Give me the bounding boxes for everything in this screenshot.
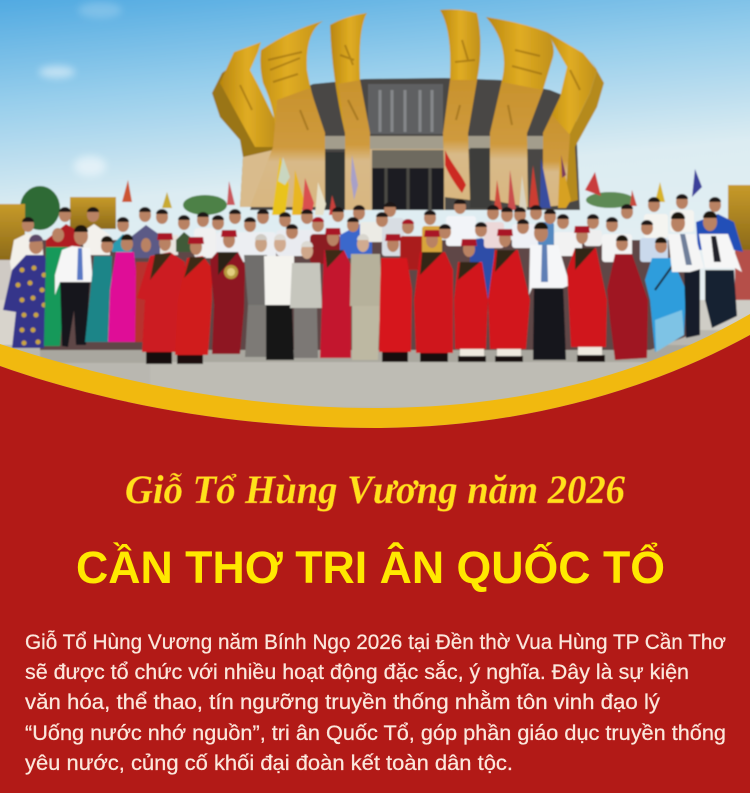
petal centre left: [330, 13, 370, 210]
back row clothing: [10, 210, 743, 300]
crowd: front row: [3, 211, 742, 364]
script subtitle: Giỗ Tổ Hùng Vương năm 2026: [125, 467, 625, 512]
purple ao dai man: [3, 234, 54, 348]
white shirt man grey tie: [668, 212, 704, 338]
sky: [0, 0, 750, 345]
red robe 5: [454, 239, 488, 362]
petal left big: [250, 21, 325, 207]
body paragraph: “Uống nước nhớ nguồn”, tri ân Quốc Tổ, góp phần giáo dục truyền thống: [25, 722, 726, 745]
drum wall: [250, 78, 580, 210]
red robe 6: [488, 229, 530, 362]
white shirt man with blue tie: [55, 225, 93, 347]
photo: sky, temple and delegation: [0, 0, 750, 430]
flags: [122, 150, 702, 215]
back row hair: [22, 194, 721, 229]
body paragraph: yêu nước, củng cố khối đại đoàn kết toàn dân tộc.: [25, 752, 513, 775]
dark red robe with medallion: [210, 230, 245, 354]
body paragraph: [25, 631, 726, 775]
dark red ao dai: [607, 235, 648, 360]
trees and gold drums in the background: [0, 185, 750, 320]
blue ao dai with bag: [645, 237, 686, 352]
body paragraph: sẽ được tổ chức với nhiều hoạt động đặc sắc, ý nghĩa. Đây là sự kiện: [25, 661, 689, 684]
pink ao dai: [108, 234, 138, 342]
white shirt man black trousers: [264, 234, 295, 360]
back row faces: [22, 195, 721, 239]
red robe 7: [567, 226, 607, 362]
floral dress: [135, 238, 152, 342]
building: golden crown temple: [212, 9, 604, 210]
plaza ground and steps: [0, 300, 750, 430]
red panel: [0, 335, 750, 793]
grey shirt man: [244, 234, 267, 357]
teal ao dai: [85, 236, 113, 342]
yellow curved band: [0, 314, 750, 428]
white shirt man dark tie: [699, 211, 742, 328]
petal centre right: [440, 9, 480, 200]
crimson robe: [320, 228, 351, 358]
red robe 4: [414, 230, 453, 362]
body paragraph: Giỗ Tổ Hùng Vương năm Bính Ngọ 2026 tại Đền thờ Vua Hùng TP Cần Thơ: [25, 631, 726, 654]
red robe 3: [379, 234, 412, 362]
crowd: back rows: [10, 194, 743, 350]
dark backing between figures: [14, 240, 690, 350]
far right petals: [560, 58, 604, 205]
light jacket man: [290, 241, 322, 358]
beige suit man: [350, 234, 382, 360]
main heading: CẦN THƠ TRI ÂN QUỐC TỔ: [76, 542, 665, 593]
red robe 1: [137, 233, 185, 364]
white shirt man with blue tie right: [529, 222, 570, 360]
petal glyph carvings: [240, 40, 580, 130]
body paragraph: văn hóa, thể thao, tín ngưỡng truyền thống nhằm tôn vinh đạo lý: [25, 691, 661, 714]
petal right big: [486, 17, 554, 207]
green dress: [44, 228, 68, 346]
red robe 2: [175, 237, 212, 364]
clouds: [39, 2, 122, 176]
far left petals: [212, 50, 275, 207]
